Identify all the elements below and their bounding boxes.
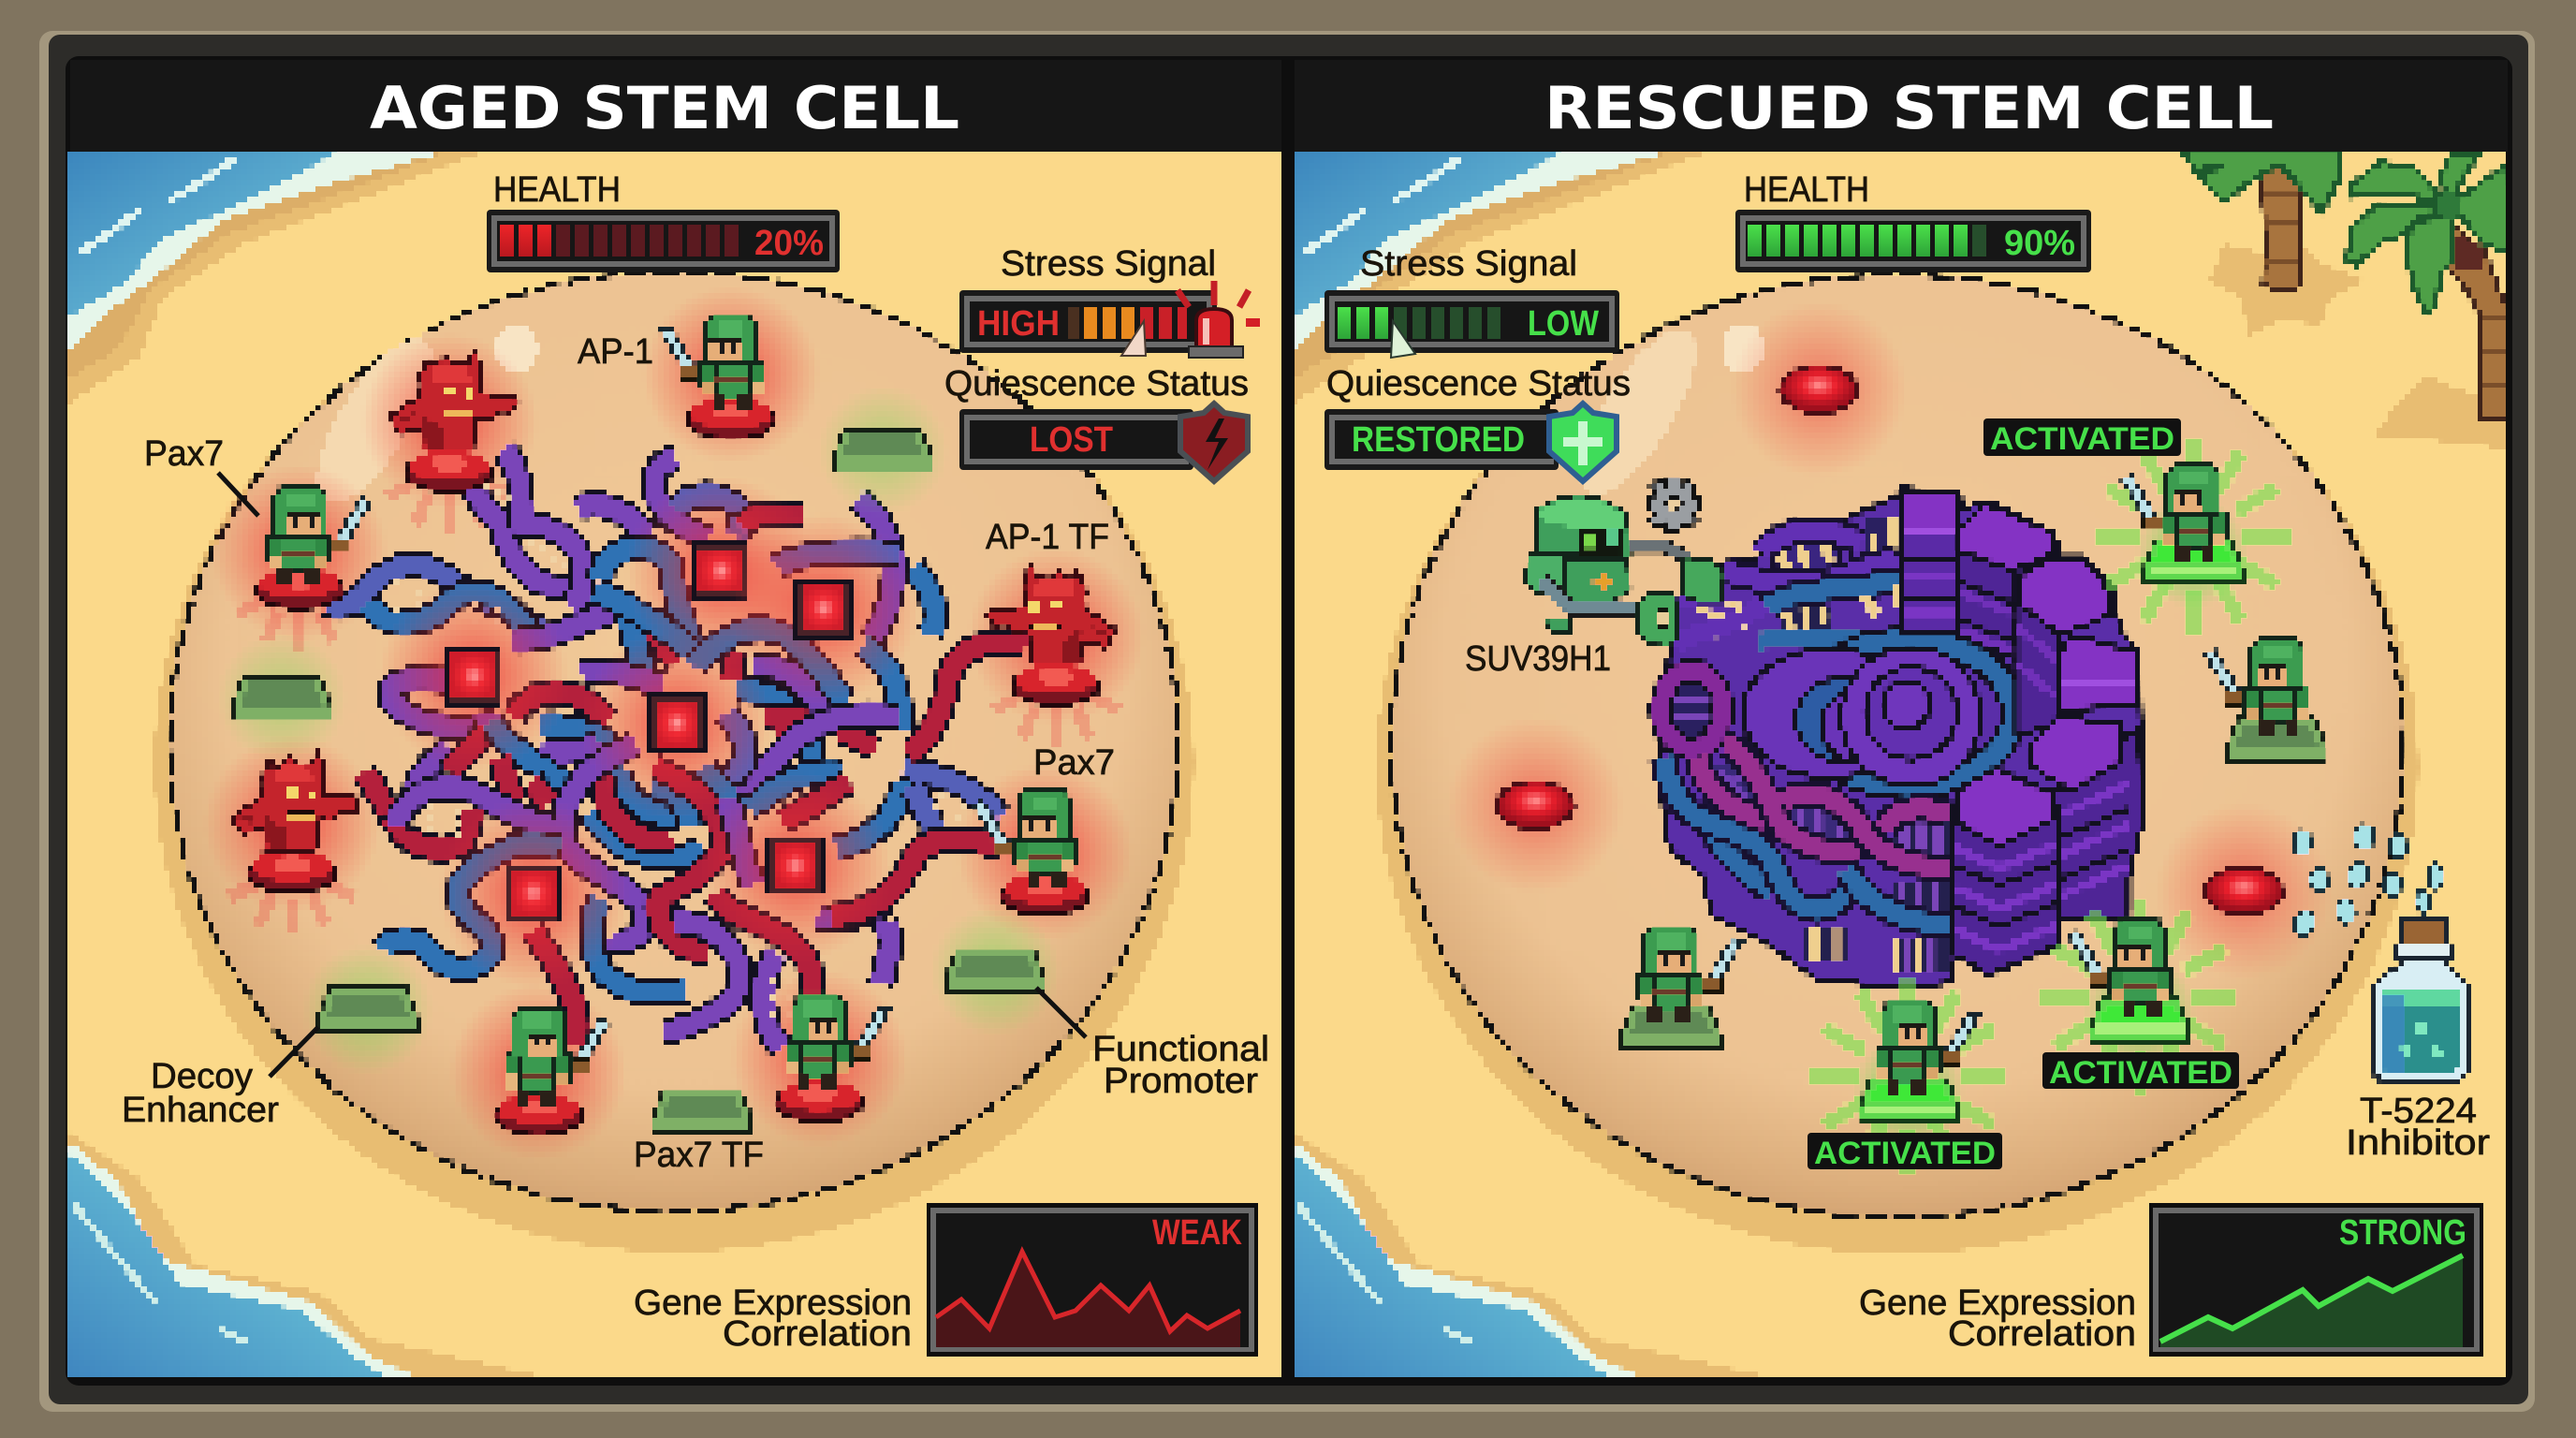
panel: aged sand background: [70, 152, 1281, 1379]
quiescence bar rescued: RESTORED: [1352, 420, 1525, 460]
glows: aged cell: [203, 286, 1145, 1161]
lower helices: [1662, 743, 1949, 972]
tangled chromatin: [328, 449, 1026, 1049]
aged beach water: [70, 152, 559, 1379]
stress bar aged: [959, 290, 1217, 356]
label: Pax7 left: Pax7: [144, 434, 224, 474]
label: Functional Promoter: [1036, 988, 1269, 1101]
panel divider: [1281, 152, 1295, 1379]
badge: activated bottom: ACTIVATED: [1814, 1136, 1996, 1171]
knight: idle right: [2205, 639, 2326, 761]
label: Gene Expression rescued: [1859, 1284, 2136, 1354]
panel: rescued sand background: [1295, 152, 2508, 1379]
quiescence label rescued: Quiescence Status: [1326, 364, 1631, 404]
label: AP-1: AP-1: [578, 332, 653, 372]
label: Functional Promoter: Functional: [1092, 1030, 1269, 1069]
icon: siren: [1178, 281, 1260, 358]
header: rescued: [1295, 60, 2508, 152]
label: Gene Expression rescued: Correlation: [1948, 1314, 2136, 1354]
health bar rescued: [1735, 210, 2091, 272]
header: aged: [70, 60, 1281, 152]
icon: T-5224 potion: [2372, 918, 2468, 1083]
palm trees: [2183, 152, 2508, 449]
red signal chips: [378, 476, 919, 989]
label: Pax7 right: Pax7: [1033, 743, 1115, 783]
label: T-5224 Inhibitor: T-5224: [2360, 1092, 2477, 1131]
chart: weak correlation: [927, 1203, 1258, 1357]
rescued beach water: [1295, 152, 1783, 1379]
health label rescued: HEALTH: [1744, 170, 1869, 210]
health label aged: HEALTH: [493, 170, 621, 210]
red bases and knights: [256, 315, 1089, 1135]
label: Pax7 TF: Pax7 TF: [634, 1136, 764, 1175]
red buttons on rescued cell: [1446, 301, 2333, 980]
potion bubbles: [2293, 825, 2443, 935]
stress label rescued: Stress Signal: [1360, 244, 1577, 284]
green promoter pads: [216, 385, 1061, 1133]
health bar rescued: 90%: [2004, 224, 2075, 263]
cell: rescued: [1376, 274, 2419, 1255]
label: Decoy Enhancer: Enhancer: [122, 1091, 279, 1130]
quiescence bar aged: [959, 409, 1193, 470]
badge: activated right: ACTIVATED: [2049, 1055, 2232, 1091]
histone blocks: [1901, 491, 2143, 976]
label: Gene Expression rescued: Gene Expression: [1859, 1284, 2136, 1323]
quiescence bar rescued: [1325, 409, 1559, 470]
chart: strong correlation: [2149, 1203, 2483, 1357]
stress label aged: Stress Signal: [1001, 244, 1216, 284]
knight: activated lower right: [2042, 899, 2238, 1095]
knight: activated bottom: [1810, 978, 2007, 1175]
upper helix rungs: [1676, 520, 1901, 649]
label: Gene Expression aged: [634, 1284, 912, 1354]
robot: SUV39H1: [1526, 494, 1724, 646]
label: SUV39H1: SUV39H1: [1465, 639, 1611, 679]
badge: activated top: ACTIVATED: [1990, 421, 2174, 457]
icon: broken shield: [1180, 404, 1248, 481]
label: Decoy Enhancer: Decoy: [151, 1057, 253, 1096]
chart: strong correlation: STRONG: [2339, 1213, 2466, 1253]
compact chromatin: [1654, 489, 2143, 989]
health bar aged: 20%: [754, 224, 824, 263]
icon: gear: [1647, 477, 1700, 530]
rings: [1743, 640, 2013, 786]
knight: activated top: [2094, 438, 2291, 635]
label: AP-1 TF: AP-1 TF: [986, 518, 1109, 557]
red bases and monsters: [231, 350, 1117, 892]
label: Gene Expression aged: Gene Expression: [634, 1284, 912, 1323]
quiescence bar aged: LOST: [1030, 420, 1113, 460]
label: T-5224 Inhibitor: Inhibitor: [2346, 1123, 2490, 1163]
stress bar rescued: [1325, 290, 1619, 358]
label: Decoy Enhancer: [122, 1027, 318, 1130]
title: rescued stem cell: RESCUED STEM CELL: [1544, 74, 2274, 142]
knight: idle lower left: [1621, 927, 1742, 1049]
label: Gene Expression aged: Correlation: [723, 1314, 912, 1354]
cell: aged: [154, 271, 1194, 1253]
health bar aged: [487, 210, 840, 272]
chart: weak correlation: WEAK: [1152, 1213, 1242, 1253]
label: Pax7 left: [144, 434, 258, 516]
stress bar rescued: LOW: [1528, 304, 1599, 344]
icon: green shield: [1549, 404, 1617, 481]
left ring: [1661, 670, 1722, 749]
stress bar aged: HIGH: [977, 304, 1060, 344]
quiescence label aged: Quiescence Status: [944, 364, 1249, 404]
label: Functional Promoter: Promoter: [1104, 1062, 1258, 1101]
label: T-5224 Inhibitor: [2346, 1092, 2490, 1163]
title: aged stem cell: AGED STEM CELL: [370, 74, 959, 142]
